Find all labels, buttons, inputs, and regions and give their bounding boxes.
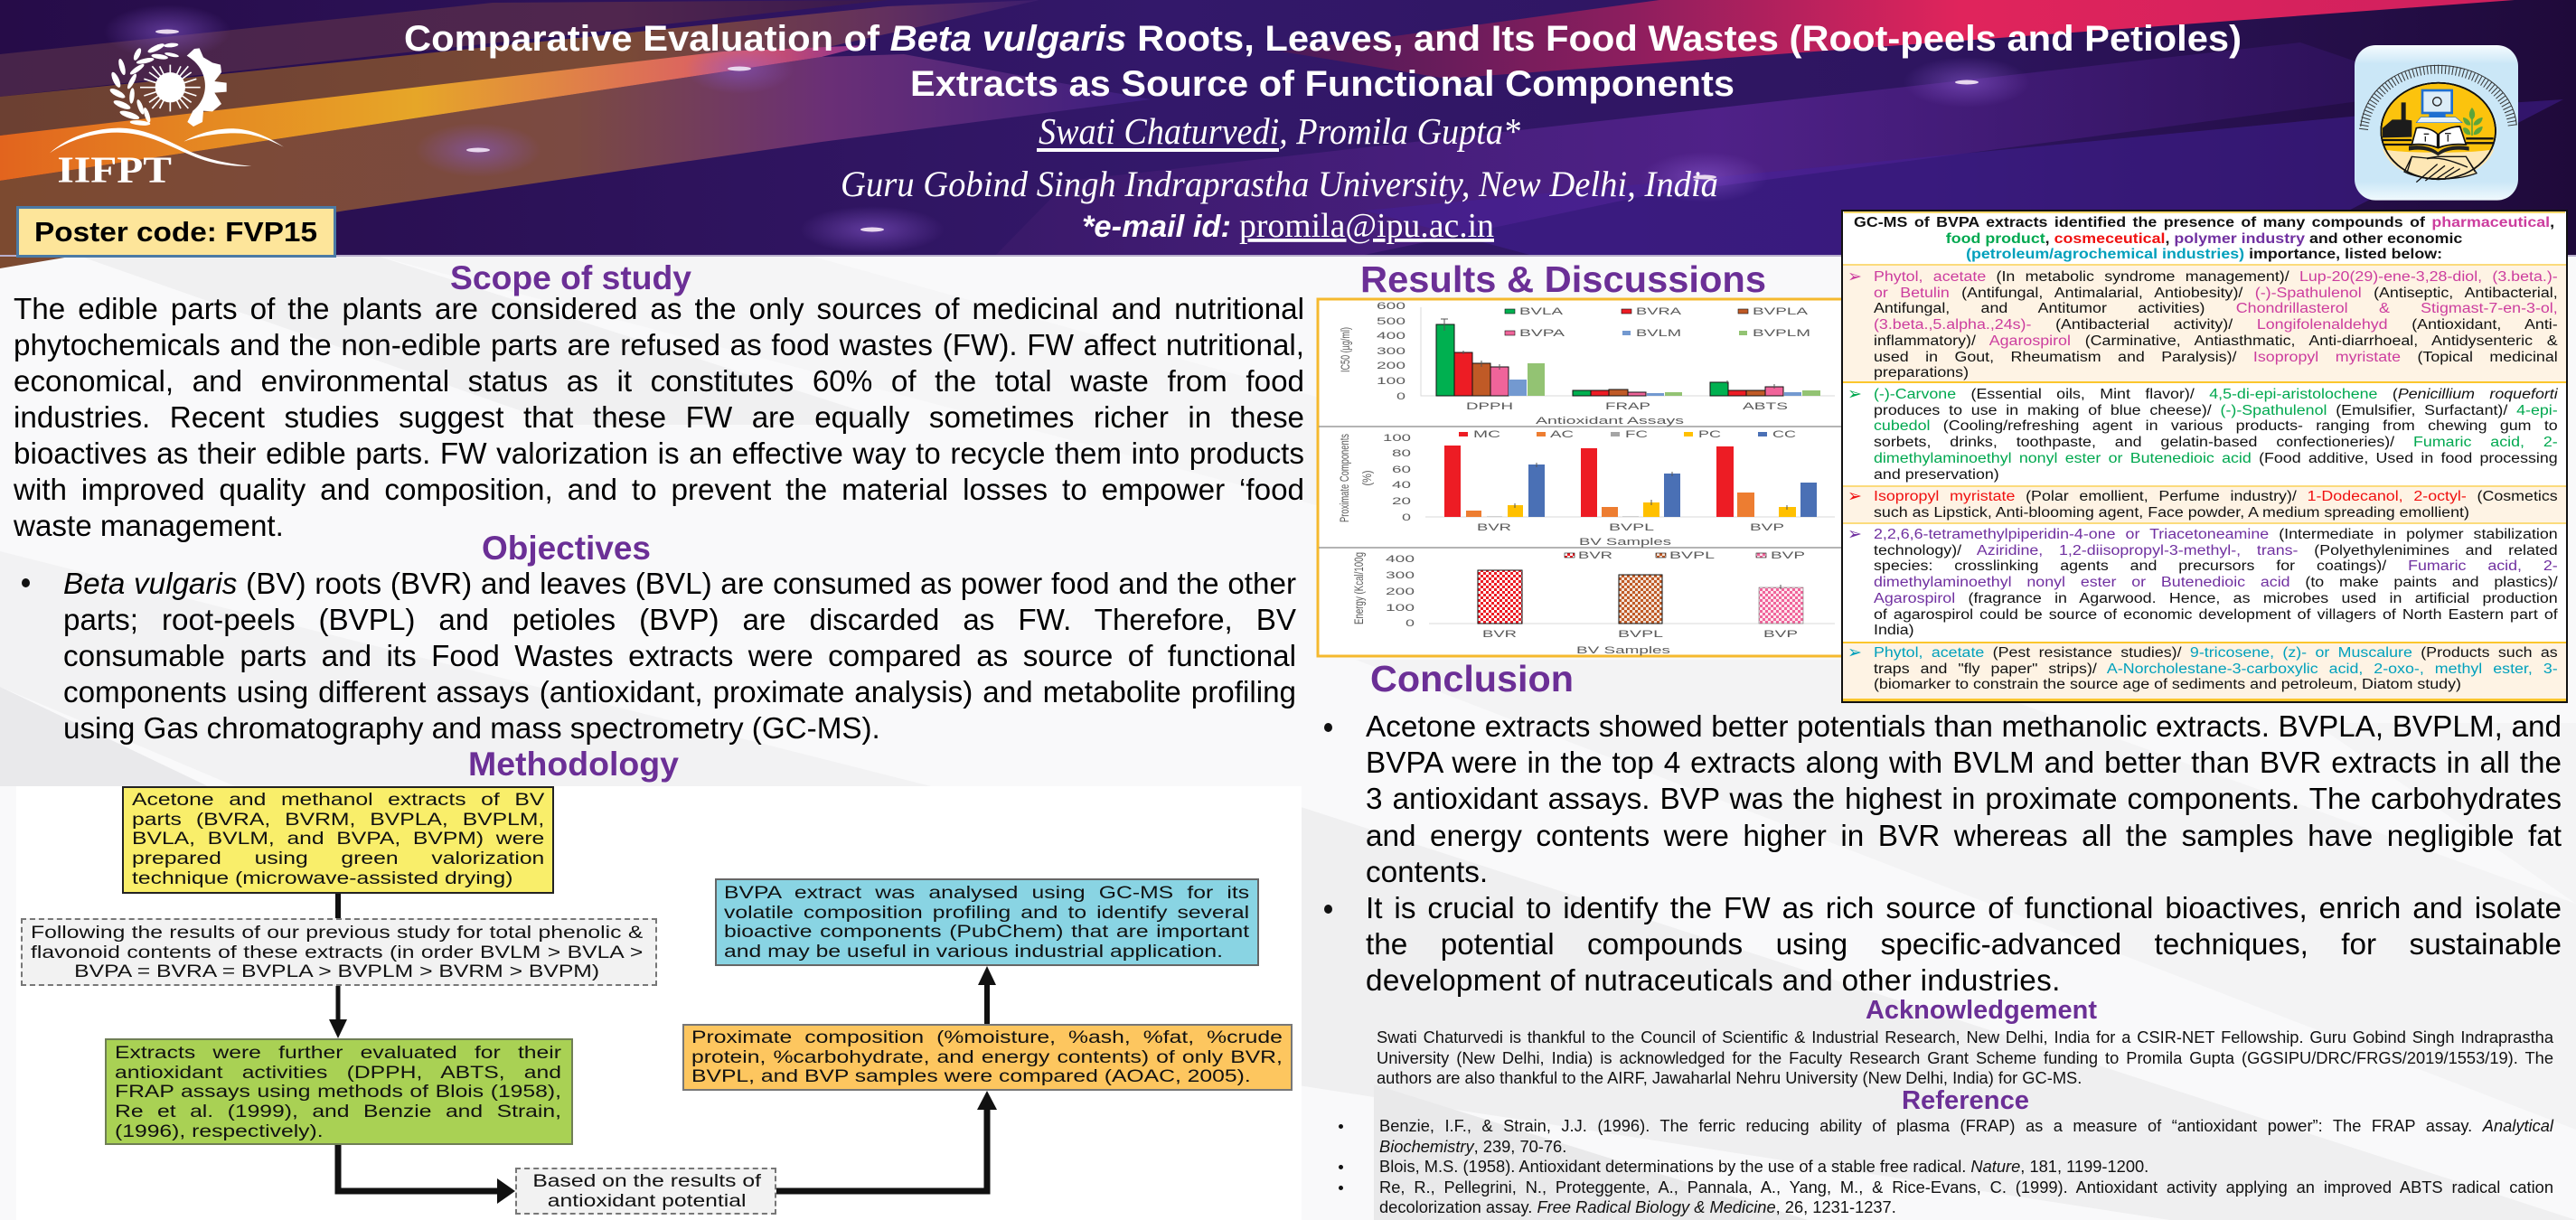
- reference lines: Re, R., Pellegrini, N., Proteggente, A., Pannala, A., Yang, M., & Rice-Evans, C. (1999). Antioxidant activity applying an improved ABTS radical cation: [1379, 1178, 2553, 1197]
- chart: proximate components: 40: [1392, 480, 1411, 491]
- conclusion lines: and energy contents were higher in BVR whereas all the samples have negligible fat: [1366, 820, 2562, 853]
- conclusion lines: Acetone extracts showed better potentials than methanolic extracts. BVPLA, BVPLM, and: [1366, 710, 2562, 744]
- monitor: [2422, 90, 2452, 113]
- chart: proximate components: 20: [1392, 496, 1411, 507]
- row text: pharmaceutical: Phytol, acetate (In metabolic syndrome management)/ Lup-20(29)-ene-3,28-diol, (3.beta.)-: [1874, 269, 2558, 285]
- text: acknowledgement: University (New Delhi, India) is acknowledged for the Faculty Research Grant Scheme funding to Promila Gupta (GGSIPU/DRC/FRGS/2019/1553/19). The: [1377, 1048, 2553, 1067]
- chart: antioxidant assays: BVLM: [1636, 328, 1681, 339]
- chart: proximate components: 80: [1392, 448, 1411, 459]
- chart: antioxidant assays: BVPA: [1519, 328, 1565, 339]
- row text: pharmaceutical: Antifungal, and Antitumor activities) Chondrillasterol & Stigmast-7-en-3-ol,: [1874, 301, 2558, 316]
- chart: antioxidant assays: IC50 (µg/ml): [1338, 327, 1352, 372]
- chart: antioxidant assays: 500: [1377, 316, 1406, 327]
- title: [404, 19, 2242, 245]
- logo sun: [140, 65, 201, 111]
- title: Guru Gobind Singh Indraprastha University, New Delhi, India: [841, 164, 1718, 204]
- header background: [0, 0, 2576, 268]
- flow box: antioxidant assays: [105, 1038, 573, 1145]
- logo wreath: [108, 42, 179, 127]
- flow box: GC-MS: and may be useful in various industrial application.: [724, 943, 1223, 962]
- row text: food product: sorbets, drinks, toothpaste, and gelatin-based confectioneries)/ Fumaric acid, 2-: [1874, 435, 2558, 450]
- flow box: antioxidant assays: Extracts were further evaluated for their: [115, 1044, 561, 1063]
- logo hills: [50, 128, 251, 166]
- objectives lines: components using different assays (antioxidant, proximate analysis) and metabolite profiling: [63, 676, 1296, 709]
- logo wordmark: IIFPT: [57, 150, 172, 192]
- chart: antioxidant assays: 400: [1377, 331, 1406, 342]
- row text: food product: dimethylaminoethyl nonyl ester or Butenedioic acid (Food additive, Used in food processing: [1874, 451, 2558, 466]
- chart: proximate components: MC: [1473, 429, 1500, 440]
- flow box: extraction: technique (microwave-assisted drying): [132, 869, 512, 888]
- bullet one: [1324, 723, 1332, 732]
- objectives lines: parts; root-peels (BVPL) and petioles (BVP) are discarded as FW. Therefore, BV: [63, 604, 1296, 637]
- chart: energy: [1351, 550, 1835, 656]
- panel: result charts: [1316, 298, 1841, 658]
- row text: petroleum: (biomarker to constrain the source age of sediments and petroleum, Diatom study): [1874, 677, 2461, 692]
- chart: energy: Energy (Kcal/100g: [1351, 552, 1366, 624]
- chart: energy: BVP: [1771, 550, 1805, 561]
- text: conclusion: [1324, 710, 2562, 998]
- row text: polymer: species: crosslinking agents and precursors for coatings)/ Fumaric acid, 2-: [1874, 558, 2558, 574]
- row bullet: food product: ➢: [1847, 384, 1862, 404]
- conclusion lines: contents.: [1366, 856, 1488, 889]
- chart: antioxidant assays: DPPH: [1466, 401, 1513, 412]
- text: objectives: [22, 568, 1296, 746]
- row text: polymer: dimethylaminoethyl nonyl ester or Butenedioic acid (to make paints and plastics)/: [1874, 575, 2558, 590]
- text: scope of study: with improved quality and composition, and to prevent the material losses to empower ‘food: [14, 474, 1304, 507]
- row text: food product: cubedol (Cooling/refreshing agent in various products- ranging from chewing gum to: [1874, 418, 2558, 434]
- conclusion lines: [1366, 710, 2562, 998]
- flow box: extraction: parts (BVRA, BVRM, BVPLA, BVPLM,: [132, 811, 544, 830]
- chart: proximate components: BVR: [1477, 522, 1511, 533]
- panel heading: GC-MS summary: food product, cosmeceutical, polymer industry and other economic: [1946, 231, 2462, 247]
- row text: food product: [1874, 387, 2558, 483]
- chart: proximate components: FC: [1625, 429, 1648, 440]
- reference lines: decolorization assay. Free Radical Biology & Medicine, 26, 1231-1237.: [1379, 1197, 1896, 1216]
- heading: scope of study: Scope of study: [450, 259, 691, 296]
- flow box: GC-MS: volatile composition profiling and to identify several: [724, 904, 1249, 923]
- row bullet: petroleum: ➢: [1847, 643, 1862, 662]
- flowchart arrows: [329, 894, 997, 1204]
- flow box: GC-MS: bioactive components (PubChem) that are important: [724, 923, 1249, 942]
- chart: antioxidant assays: BVPLM: [1753, 328, 1810, 339]
- row text: food product: produces to use in making of blue cheese)/ (-)-Spathulenol (Emulsifier, Surfactant)/ 4-epi-: [1874, 403, 2558, 418]
- flow box: previous study: [21, 918, 657, 986]
- conclusion lines: BVPA were in the top 4 extracts along with BVLM and better than BVR extracts in all the: [1366, 746, 2562, 780]
- flow box: proximate composition: Proximate composition (%moisture, %ash, %fat, %crude: [691, 1028, 1283, 1047]
- row text: cosmeceutical: such as Lipstick, Anti-blooming agent, Face powder, A medium spreading emollient): [1874, 505, 2469, 521]
- reference lines: Benzie, I.F., & Strain, J.J. (1996). The ferric reducing ability of plasma (FRAP) as a measure of “antioxidant power”: The FRAP assay. Analytical: [1379, 1116, 2553, 1135]
- chart: proximate components: 100: [1383, 433, 1411, 444]
- panel row backgrounds: [1843, 264, 2566, 701]
- chart: energy: 200: [1386, 587, 1415, 597]
- chart: antioxidant assays: BVRA: [1636, 306, 1682, 317]
- title: promila@ipu.ac.in: [1239, 207, 1494, 245]
- row text: pharmaceutical: [1874, 269, 2558, 380]
- row text: pharmaceutical: preparations): [1874, 365, 1969, 380]
- row text: polymer: 2,2,6,6-tetramethylpiperidin-4-one or Triacetoneamine (Intermediate in polymer stabilization: [1874, 527, 2558, 542]
- heading: results and discussions: Results & Discussions: [1360, 258, 1766, 300]
- panel heading: GC-MS summary: [1854, 215, 2554, 262]
- chart: proximate components: Proximate Components: [1337, 434, 1351, 522]
- row text: polymer: technology)/ Aziridine, 1,2-diisopropyl-3-methyl-, trans- (Polyethylenimines and related: [1874, 543, 2558, 558]
- row text: pharmaceutical: used in Gout, Rheumatism and Paralysis)/ Isopropyl myristate (Topical medicinal: [1874, 350, 2558, 365]
- chart: proximate components: BVPL: [1609, 522, 1654, 533]
- flow box: proximate composition: BVPL, and BVP samples were compared (AOAC, 2005).: [691, 1067, 1251, 1086]
- open book: [2411, 127, 2438, 147]
- bullet two: [1324, 905, 1332, 914]
- chart: proximate components: AC: [1550, 429, 1574, 440]
- objectives lines: using Gas chromatography and mass spectrometry (GC-MS).: [63, 712, 880, 746]
- text: acknowledgement: [1377, 1028, 2554, 1087]
- chart: proximate components: 60: [1392, 465, 1411, 475]
- chart: antioxidant assays: 200: [1377, 361, 1406, 371]
- chart: proximate components: (%): [1359, 470, 1374, 486]
- text: scope of study: bioactives as their edible parts. FW valorization is an effective way to recycle them into products: [14, 437, 1304, 471]
- text: acknowledgement: authors are also thankful to the AIRF, Jawaharlal Nehru University (New Delhi, India) for GC-MS.: [1377, 1068, 2082, 1087]
- objectives lines: consumable parts and its Food Wastes extracts were compared as source of functional: [63, 640, 1296, 673]
- chart: energy: BVR: [1482, 629, 1517, 640]
- flow box: antioxidant potential: antioxidant potential: [548, 1192, 747, 1211]
- flow box: extraction: prepared using green valorization: [132, 849, 544, 868]
- row text: pharmaceutical: or Betulin (Antifungal, Antimalarial, Antiobesity)/ (-)-Spathulenol (Antiseptic, Antibacterial,: [1874, 286, 2558, 301]
- heading: reference: Reference: [1902, 1086, 2029, 1115]
- text: scope of study: economical, and environmental status as it constitutes 60% of the total waste from food: [14, 365, 1304, 399]
- reference bullets: [1338, 1116, 1347, 1218]
- plant: [2469, 108, 2475, 119]
- reference lines: Blois, M.S. (1958). Antioxidant determinations by the use of a stable free radical. Nature, 181, 1199-1200.: [1379, 1157, 2148, 1176]
- flow box: antioxidant assays: Re et al. (1999), and Benzie and Strain,: [115, 1103, 561, 1121]
- row text: cosmeceutical: Isopropyl myristate (Polar emollient, Perfume industry)/ 1-Dodecanol, 2-octyl- (Cosmetics: [1874, 489, 2558, 504]
- icon: university emblem: [2355, 45, 2518, 201]
- bullet: [22, 578, 30, 587]
- chart: energy: BVR: [1578, 550, 1612, 561]
- motto ring: [2364, 70, 2513, 129]
- row text: polymer: Agarospirol (fragrance in Agarwood. Hence, as microbes used in artificial production: [1874, 591, 2558, 606]
- conclusion lines: It is crucial to identify the FW as rich source of functional bioactives, enrich and isolate: [1366, 892, 2562, 925]
- chart: proximate components: BVP: [1750, 522, 1784, 533]
- chart: energy: 0: [1406, 618, 1415, 629]
- chart: antioxidant assays: ABTS: [1743, 401, 1788, 412]
- chart: proximate components: PC: [1698, 429, 1721, 440]
- row text: polymer: of agarospirol could be source of economic development of villagers of North Eastern part of: [1874, 607, 2558, 623]
- chart: energy: 300: [1386, 570, 1415, 581]
- handshake: [2404, 156, 2477, 179]
- title: *e-mail id:: [1082, 210, 1231, 244]
- chart: energy: 100: [1386, 603, 1415, 614]
- chart: energy: BVPL: [1618, 629, 1663, 640]
- row text: petroleum: traps and "fly paper" strips)/ A-Norcholestane-3-carboxylic acid, 2-oxo-, methyl ester, 3-: [1874, 662, 2558, 677]
- chart: energy: 400: [1386, 554, 1415, 565]
- text: scope of study: industries. Recent studies suggest that these FW are equally sometimes richer in these: [14, 401, 1304, 435]
- chart: antioxidant assays: 100: [1377, 376, 1406, 387]
- text: scope of study: phytochemicals and the non-edible parts are refused as food wastes (FW). FW affect nutritional,: [14, 329, 1304, 362]
- text: scope of study: [14, 293, 1304, 543]
- objectives lines: Beta vulgaris (BV) roots (BVR) and leaves (BVL) are consumed as power food and the other: [63, 568, 1296, 601]
- text: references: [1336, 1116, 2553, 1218]
- flow box: antioxidant assays: FRAP assays using methods of Blois (1958),: [115, 1083, 561, 1102]
- text: scope of study: waste management.: [14, 510, 284, 543]
- flow box: previous study: flavonoid contents of these extracts (in order BVLM > BVLA >: [31, 943, 643, 962]
- chart: energy: BVP: [1763, 629, 1798, 640]
- flow box: extraction: BVLA, BVLM, and BVPA, BVPM) were: [132, 830, 544, 849]
- chart: antioxidant assays: 0: [1396, 391, 1406, 402]
- row text: petroleum: [1874, 645, 2558, 692]
- logo gear: [187, 48, 227, 127]
- chart: proximate components: [1337, 429, 1835, 548]
- row text: pharmaceutical: (3.beta.,5.alpha.,24s)- (Antibacterial activity)/ Longifolenaldehyd (Antioxidant, Anti-: [1874, 317, 2558, 333]
- chart: energy: BVPL: [1669, 550, 1715, 561]
- row text: pharmaceutical: inflammatory)/ Agarospirol (Carminative, Antiasthmatic, Anti-diarrhoeal, Antidysenteric &: [1874, 333, 2558, 349]
- row text: polymer: India): [1874, 623, 1914, 638]
- chart: antioxidant assays: 600: [1377, 301, 1406, 312]
- chart: antioxidant assays: 300: [1377, 346, 1406, 357]
- chart: antioxidant assays: BVPLA: [1753, 306, 1809, 317]
- flow box: antioxidant potential: [515, 1168, 776, 1215]
- chart: antioxidant assays: [1338, 301, 1835, 427]
- chart: proximate components: BV Samples: [1579, 537, 1672, 548]
- title: Swati Chaturvedi, Promila Gupta*: [1039, 110, 1520, 152]
- panel heading: GC-MS summary: GC-MS of BVPA extracts identified the presence of many compounds of pharmaceutical,: [1854, 215, 2554, 230]
- conclusion lines: development of nutraceuticals and other industries.: [1366, 964, 2061, 998]
- heading: acknowledgement: Acknowledgement: [1866, 996, 2097, 1025]
- flow box: proximate composition: protein, %carbohydrate, and energy contents) of only BVR,: [691, 1048, 1283, 1067]
- flow box: extraction: [122, 786, 554, 894]
- row text: food product: (-)-Carvone (Essential oils, Mint flavor)/ 4,5-di-epi-aristolochene (Penicillium roqueforti: [1874, 387, 2558, 402]
- factory: [2383, 102, 2411, 137]
- poster code badge: Poster code: FVP15: [34, 216, 317, 248]
- flow box: proximate composition: [682, 1024, 1293, 1091]
- reference lines: [1379, 1116, 2553, 1218]
- text: acknowledgement: Swati Chaturvedi is thankful to the Council of Scientific & Industrial Research, New Delhi, India for a CSIR-NET Fellowship. Guru Gobind Singh Indraprastha: [1377, 1028, 2553, 1046]
- text: scope of study: The edible parts of the plants are considered as the only sources of medicinal and nutritional: [14, 293, 1304, 326]
- reference lines: Biochemistry, 239, 70-76.: [1379, 1137, 1566, 1156]
- panel: methodology flowchart: [16, 786, 1302, 1220]
- poster code badge: [16, 206, 336, 258]
- row text: polymer: [1874, 527, 2558, 638]
- flow box: extraction: Acetone and methanol extracts of BV: [132, 791, 544, 810]
- conclusion lines: 3 antioxidant assays. BVP was the highest in proximate components. The carbohydrates: [1366, 783, 2562, 816]
- panel heading: GC-MS summary: (petroleum/agrochemical industries) importance, listed below:: [1966, 247, 2442, 262]
- flow box: antioxidant potential: Based on the results of: [532, 1172, 761, 1191]
- flow box: antioxidant assays: antioxidant activities (DPPH, ABTS, and: [115, 1064, 561, 1083]
- row bullet: polymer: ➢: [1847, 524, 1862, 544]
- water lines: [2383, 138, 2494, 145]
- row text: food product: and preservation): [1874, 467, 1999, 483]
- title: Comparative Evaluation of Beta vulgaris Roots, Leaves, and Its Food Wastes (Root-peels and Petioles): [404, 19, 2242, 59]
- row bullet: pharmaceutical: ➢: [1847, 267, 1862, 286]
- chart: antioxidant assays: FRAP: [1605, 401, 1650, 412]
- chart: proximate components: 0: [1402, 512, 1411, 523]
- flow box: GC-MS: [715, 878, 1259, 966]
- chart: proximate components: CC: [1772, 429, 1796, 440]
- panel: GC-MS compounds: [1841, 210, 2568, 703]
- title: Extracts as Source of Functional Components: [910, 64, 1735, 104]
- flow box: previous study: Following the results of our previous study for total phenolic &: [31, 924, 643, 943]
- heading: methodology: Methodology: [468, 746, 679, 783]
- heading: conclusion: Conclusion: [1370, 658, 1574, 699]
- row text: petroleum: Phytol, acetate (Pest resistance studies)/ 9-tricosene, (z)- or Muscalure (Products such as: [1874, 645, 2558, 661]
- flow box: GC-MS: BVPA extract was analysed using GC-MS for its: [724, 884, 1249, 903]
- objectives lines: [63, 568, 1296, 746]
- row bullet: cosmeceutical: ➢: [1847, 486, 1862, 506]
- flow box: previous study: BVPA = BVRA = BVPLA > BVPLM > BVRM > BVPM): [74, 962, 599, 981]
- conclusion lines: the potential compounds using specific-advanced techniques, for sustainable: [1366, 928, 2562, 962]
- row text: cosmeceutical: [1874, 489, 2558, 521]
- chart: energy: BV Samples: [1576, 645, 1671, 656]
- heading: objectives: Objectives: [482, 530, 651, 567]
- chart: antioxidant assays: BVLA: [1519, 306, 1564, 317]
- flow box: antioxidant assays: (1996), respectively).: [115, 1122, 324, 1141]
- icon: IIFPT logo: [50, 42, 284, 192]
- chart: antioxidant assays: Antioxidant Assays: [1536, 416, 1685, 427]
